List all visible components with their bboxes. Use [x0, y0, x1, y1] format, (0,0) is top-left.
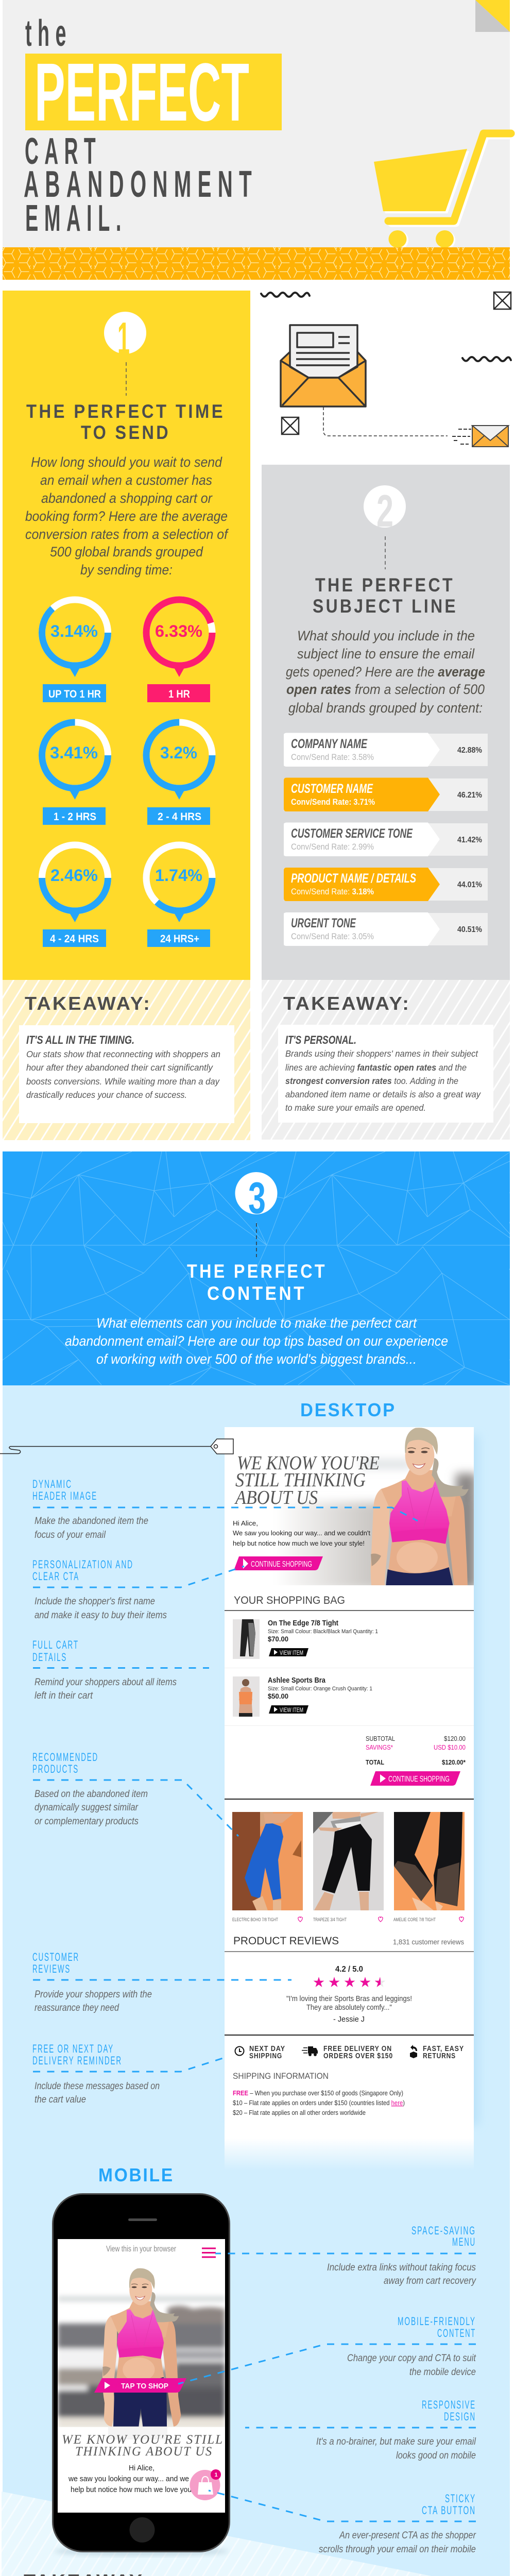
annotation: mobile-friendly content [178, 2315, 476, 2384]
cart item 1: $70.00 [268, 1635, 288, 1643]
shipping information: SHIPPING INFORMATION [233, 2071, 329, 2081]
icon: truck [302, 2046, 318, 2056]
bar: customer name: Conv/Send Rate: 3.71% [291, 797, 375, 807]
panel: section 3 perfect content [3, 1151, 515, 1385]
chart: 1-2 hrs 3.41% [42, 722, 108, 825]
delivery icons row: FREE DELIVERY ON [323, 2045, 392, 2053]
bar: customer service tone [284, 822, 488, 856]
heading: SUBJECT LINE [313, 596, 458, 617]
review: - Jessie J [333, 2015, 365, 2024]
button: tap to shop [94, 2378, 186, 2393]
annotation: recommended products: or complementary products [35, 1816, 139, 1827]
delivery icons row: NEXT DAY [249, 2045, 285, 2053]
product photo 1 [232, 1812, 303, 1910]
bar: urgent tone: Conv/Send Rate: 3.05% [291, 931, 374, 941]
intro text: conversion rates from a selection of [25, 527, 229, 542]
annotation: customer reviews: reassurance they need [35, 2003, 119, 2013]
icon: returns box [410, 2045, 417, 2058]
chart: 1-2 hrs 3.41%: 3.41% [50, 743, 98, 762]
chart: 4-24 hrs 2.46%: 2.46% [50, 866, 98, 885]
totals: $120.00 [444, 1735, 466, 1742]
annotation: space-saving menu [215, 2224, 476, 2286]
title highlight: PERFECT: PERFECT [35, 46, 249, 138]
chart: 1 hr 6.33%: 1 HR [168, 688, 190, 700]
button: continue shopping: CONTINUE SHOPPING [251, 1560, 312, 1569]
annotation: sticky cta button: STICKY [445, 2492, 476, 2505]
takeaway text box: IT'S ALL IN THE TIMING. [26, 1033, 134, 1046]
chart: 2-4 hrs 3.2%: 2 - 4 HRS [158, 811, 201, 823]
heading [187, 1261, 327, 1304]
cart item 1: VIEW ITEM [280, 1649, 303, 1656]
annotation: responsive design: RESPONSIVE [422, 2398, 476, 2411]
browser link: View this in your browser [106, 2245, 176, 2253]
annotation: customer reviews: Provide your shoppers with the [35, 1989, 152, 2000]
number badge 2: 2 [376, 485, 393, 536]
annotation: recommended products [32, 1751, 238, 1836]
chart: up to 1 hr 3.14% [42, 600, 108, 702]
annotation: personalization and clear cta: PERSONALIZATION AND [32, 1558, 133, 1571]
annotation: customer reviews: REVIEWS [32, 1962, 71, 1975]
annotation: full cart details: left in their cart [35, 1690, 93, 1701]
bar: urgent tone: 40.51% [457, 925, 482, 934]
sticky cart button: 1 [214, 2472, 218, 2478]
review: "I'm loving their Sports Bras and leggings! [286, 1995, 412, 2003]
annotation: space-saving menu: MENU [452, 2235, 476, 2248]
annotation: responsive design: DESIGN [444, 2410, 476, 2423]
review: 4.2 / 5.0 [335, 1965, 363, 1974]
product photo 2 [313, 1812, 384, 1910]
annotation: mobile-friendly content: CONTENT [437, 2327, 476, 2340]
heading: mobile: MOBILE [98, 2164, 174, 2185]
cart item 2 [233, 1676, 372, 1717]
product reviews heading [233, 1935, 464, 1947]
icon: open envelope [281, 325, 366, 406]
takeaway text box: IT'S PERSONAL. [285, 1033, 356, 1046]
chart: 1 hr 6.33%: 6.33% [155, 622, 202, 640]
intro text: gets opened? Here are the average [286, 664, 485, 680]
phone mockup [53, 2194, 230, 2555]
totals: SUBTOTAL [366, 1735, 395, 1742]
annotation: sticky cta button: An ever-present CTA as the shopper [339, 2530, 476, 2541]
cart item 1 [233, 1619, 378, 1659]
heading: THE PERFECT [187, 1261, 327, 1282]
takeaway text box [19, 1025, 234, 1123]
intro text: What should you include in the [297, 628, 475, 643]
intro text: global brands grouped by content: [288, 700, 483, 716]
annotation: sticky cta button: scrolls through your email on their mobile [319, 2544, 476, 2555]
totals: SAVINGS* [366, 1743, 393, 1751]
annotation: space-saving menu: SPACE-SAVING [411, 2224, 476, 2237]
bar: product name details [284, 868, 488, 901]
intro text [65, 1315, 448, 1367]
intro text: abandoned a shopping cart or [41, 490, 213, 506]
annotation: space-saving menu: Include extra links without taking focus [327, 2262, 476, 2273]
shipping information: $20 – Flat rate applies on all other orders worldwide [233, 2109, 366, 2116]
totals: USD $10.00 [434, 1743, 466, 1751]
product reviews heading: PRODUCT REVIEWS [233, 1935, 339, 1947]
annotation: full cart details: FULL CART [32, 1638, 79, 1651]
pattern band [3, 247, 510, 280]
button: continue shopping [234, 1556, 323, 1570]
intro text [25, 454, 229, 578]
greeting text [233, 1519, 370, 1547]
delivery icons row: FAST, EASY [423, 2045, 464, 2053]
sticky cart button [190, 2469, 221, 2500]
bar: customer service tone: CUSTOMER SERVICE TONE [291, 826, 413, 841]
totals: $120.00* [442, 1758, 466, 1766]
cart item 2: Ashlee Sports Bra [268, 1676, 326, 1685]
shopping bag heading: YOUR SHOPPING BAG [234, 1595, 345, 1606]
annotation: dynamic header image: focus of your email [35, 1530, 106, 1540]
takeaway text box: Brands using their shoppers' names in their subject [285, 1048, 478, 1059]
takeaway text box: to make sure your emails are opened. [285, 1103, 426, 1113]
phone headline [62, 2433, 224, 2459]
panel: takeaway 1 [3, 980, 250, 1140]
totals [366, 1735, 466, 1766]
icon: menu [202, 2247, 216, 2258]
heading: CONTENT [207, 1283, 306, 1304]
hero headline: STILL THINKING [235, 1469, 366, 1491]
chart: up to 1 hr 3.14%: UP TO 1 HR [48, 688, 101, 700]
bar: product name details: Conv/Send Rate: 3.18% [291, 887, 374, 896]
annotation: personalization and clear cta: and make it easy to buy their items [35, 1610, 167, 1621]
annotation: dynamic header image: HEADER IMAGE [32, 1489, 97, 1502]
bar: product name details: PRODUCT NAME / DETAILS [291, 871, 416, 886]
panel: takeaway 2 [262, 980, 510, 1140]
bar: urgent tone: URGENT TONE [291, 916, 356, 930]
intro text: open rates from a selection of 500 [286, 682, 485, 697]
annotation: mobile-friendly content: the mobile device [409, 2367, 476, 2378]
bar: company name: COMPANY NAME [291, 737, 368, 751]
icon: folded corner [475, 0, 510, 32]
takeaway heading: TAKEAWAY: [25, 993, 151, 1014]
cart item 2: VIEW ITEM [280, 1706, 303, 1714]
annotation: free or next day delivery: DELIVERY REMINDER [32, 2054, 122, 2067]
hero photo [288, 1428, 474, 1585]
delivery icons row [235, 2045, 464, 2060]
intro text [286, 628, 485, 716]
button: continue shopping 2 [370, 1771, 460, 1786]
takeaway text box: Our stats show that reconnecting with shoppers an [26, 1049, 220, 1059]
takeaway text box: hour after they abandoned their cart significantly [26, 1062, 213, 1073]
heading [313, 574, 458, 617]
heading: TO SEND [81, 422, 170, 443]
panel: content examples background [2, 1385, 510, 2576]
shipping information [233, 2071, 405, 2116]
bar: customer name [284, 778, 488, 811]
annotation: free or next day delivery: the cart value [35, 2094, 86, 2105]
bar: urgent tone [284, 912, 488, 946]
intro text: booking form? Here are the average [25, 509, 228, 524]
heading [26, 401, 225, 443]
product captions: AMELIE CORE 7/8 TIGHT [393, 1917, 436, 1923]
product captions: ELECTRIC BOHO 7/8 TIGHT [232, 1917, 278, 1923]
hero headline [234, 1452, 380, 1509]
annotation: customer reviews: CUSTOMER [32, 1951, 79, 1963]
panel: section 1 perfect time to send [3, 291, 250, 980]
bar: product name details: 44.01% [457, 880, 482, 889]
chart: 4-24 hrs 2.46% [42, 845, 108, 947]
intro text: subject line to ensure the email [297, 646, 475, 662]
intro text: of working with over 500 of the world's biggest brands... [96, 1351, 417, 1367]
takeaway text box: lines are achieving fantastic open rates and the [285, 1062, 467, 1073]
panel: title header [3, 0, 514, 249]
annotation: dynamic header image: DYNAMIC [32, 1478, 72, 1490]
annotation: free or next day delivery: Include these messages based on [35, 2081, 160, 2092]
phone headline: THINKING ABOUT US [75, 2445, 213, 2459]
intro text: by sending time: [80, 562, 173, 578]
annotation: full cart details [32, 1638, 209, 1701]
title: cart abandonment email: EMAIL. [25, 198, 127, 239]
title: cart abandonment email: CART [25, 131, 101, 172]
cart item 1: Size: Small Colour: Black/Black Marl Quantity: 1 [268, 1629, 378, 1635]
chart: 24 hrs+ 1.74%: 24 HRS+ [160, 933, 199, 945]
annotation: responsive design: looks good on mobile [396, 2450, 476, 2461]
heading: desktop: DESKTOP [300, 1399, 396, 1420]
bar: company name: 42.88% [457, 746, 482, 755]
intro text: What elements can you include to make the perfect cart [96, 1315, 417, 1331]
annotation: free or next day delivery [32, 2042, 228, 2105]
title highlight: PERFECT [25, 46, 282, 138]
takeaway text box [278, 1025, 493, 1123]
shipping information: FREE – When you purchase over $150 of goods (Singapore Only) [233, 2089, 403, 2097]
heading: THE PERFECT [315, 574, 455, 596]
phone greeting: we saw you looking our way... and we c [68, 2475, 195, 2483]
annotation: responsive design [245, 2398, 476, 2461]
greeting text: We saw you looking our way... and we couldn't [233, 1529, 370, 1537]
number badge 1: 1 [117, 313, 130, 364]
takeaway text box: abandoned item name or details is also a great way [285, 1089, 481, 1099]
button: continue shopping 2: CONTINUE SHOPPING [388, 1775, 450, 1784]
panel: section 2 perfect subject line [262, 465, 510, 980]
title: the: the [25, 13, 72, 54]
hero headline: ABOUT US [234, 1487, 318, 1509]
bar: customer service tone: Conv/Send Rate: 2.99% [291, 842, 374, 852]
greeting text: help but notice how much we love your style! [233, 1539, 365, 1547]
annotation: free or next day delivery: FREE OR NEXT DAY [32, 2042, 114, 2055]
chart: 4-24 hrs 2.46%: 4 - 24 HRS [50, 933, 99, 945]
bar: customer name: CUSTOMER NAME [291, 782, 373, 796]
chart: 2-4 hrs 3.2%: 3.2% [160, 743, 197, 762]
annotation: sticky cta button: CTA BUTTON [422, 2504, 476, 2517]
cart item 1: On The Edge 7/8 Tight [268, 1619, 338, 1628]
cart item 2: $50.00 [268, 1692, 288, 1700]
number badge 2 [364, 485, 406, 536]
intro text: an email when a customer has [40, 472, 212, 488]
phone headline: WE KNOW YOU'RE STILL [62, 2433, 224, 2447]
product captions [232, 1917, 464, 1923]
cart item 2: Size: Small Colour: Orange Crush Quantity: 1 [268, 1686, 372, 1692]
annotation: responsive design: It's a no-brainer, but make sure your email [316, 2436, 476, 2447]
intro text: abandonment email? Here are our top tips based on our experience [65, 1333, 448, 1349]
number badge 1 [104, 312, 146, 364]
annotation: personalization and clear cta: CLEAR CTA [32, 1570, 79, 1583]
annotation: dynamic header image [32, 1478, 418, 1540]
phone hero photo [58, 2268, 225, 2428]
bar: company name [284, 733, 488, 767]
annotation: dynamic header image: Make the abandoned item the [35, 1516, 148, 1527]
icon: price tag [0, 1439, 233, 1454]
greeting text: Hi Alice, [233, 1519, 258, 1527]
delivery icons row: RETURNS [423, 2052, 456, 2060]
decoration and envelope illustration [261, 292, 511, 447]
annotation: recommended products: Based on the abandoned item [35, 1789, 148, 1800]
email mockup: desktop [225, 1427, 479, 2170]
takeaway text box: boosts conversions. While waiting more than a day [26, 1076, 220, 1087]
annotation: full cart details: Remind your shoppers about all items [35, 1677, 177, 1688]
annotation: recommended products: PRODUCTS [32, 1762, 79, 1775]
annotation: full cart details: DETAILS [32, 1651, 67, 1664]
number badge 3 [235, 1172, 277, 1223]
takeaway text box: drastically reduces your chance of success. [26, 1090, 187, 1100]
icon: clock [235, 2046, 244, 2056]
bar: customer name: 46.21% [457, 791, 482, 800]
heading: THE PERFECT TIME [26, 401, 225, 422]
totals: TOTAL [366, 1758, 384, 1766]
title: cart abandonment email: ABANDONMENT [24, 164, 258, 205]
takeaway text box: strongest conversion rates too. Adding in the [285, 1076, 458, 1086]
phone greeting [68, 2464, 195, 2494]
annotation: mobile-friendly content: Change your copy and CTA to suit [347, 2353, 476, 2364]
chart: up to 1 hr 3.14%: 3.14% [50, 622, 98, 640]
bar: company name: Conv/Send Rate: 3.58% [291, 752, 374, 762]
number badge 3: 3 [248, 1174, 266, 1223]
annotation: recommended products: RECOMMENDED [32, 1751, 98, 1764]
annotation: customer reviews [32, 1951, 291, 2013]
product reviews heading: 1,831 customer reviews [393, 1938, 464, 1946]
bar: customer service tone: 41.42% [457, 836, 482, 844]
annotation: sticky cta button [209, 2490, 476, 2555]
title: cart abandonment email [24, 131, 258, 239]
takeaway heading: TAKEAWAY: [283, 993, 410, 1014]
chart: 24 hrs+ 1.74%: 1.74% [155, 866, 202, 885]
annotation: personalization and clear cta [32, 1558, 244, 1621]
shipping information: $10 – Flat rate applies on orders under $150 (countries listed here) [233, 2099, 405, 2107]
intro text: How long should you wait to send [31, 454, 222, 470]
chart: 1 hr 6.33% [146, 600, 212, 702]
delivery icons row: SHIPPING [249, 2052, 282, 2060]
phone greeting: Hi Alice, [129, 2464, 154, 2472]
icon: shopping cart [374, 133, 514, 249]
delivery icons row: ORDERS OVER $150 [323, 2052, 393, 2060]
chart: 1-2 hrs 3.41%: 1 - 2 HRS [54, 811, 96, 823]
icon: small envelope [452, 426, 508, 447]
phone greeting: help but notice how much we love you [71, 2485, 192, 2494]
annotation: personalization and clear cta: Include the shopper's first name [35, 1596, 155, 1607]
annotation: recommended products: dynamically suggest similar [35, 1802, 139, 1813]
button: tap to shop: TAP TO SHOP [121, 2382, 168, 2391]
hero headline: WE KNOW YOU'RE [237, 1452, 380, 1474]
product photo 3 [394, 1812, 465, 1910]
review [286, 1965, 412, 2024]
review: They are absolutely comfy..." [306, 2004, 392, 2012]
annotation: space-saving menu: away from cart recovery [384, 2276, 476, 2286]
chart: 2-4 hrs 3.2% [146, 722, 212, 825]
intro text: 500 global brands grouped [50, 544, 203, 560]
chart: 24 hrs+ 1.74% [146, 845, 212, 947]
product captions: TRAPEZE 3/4 TIGHT [313, 1917, 347, 1923]
